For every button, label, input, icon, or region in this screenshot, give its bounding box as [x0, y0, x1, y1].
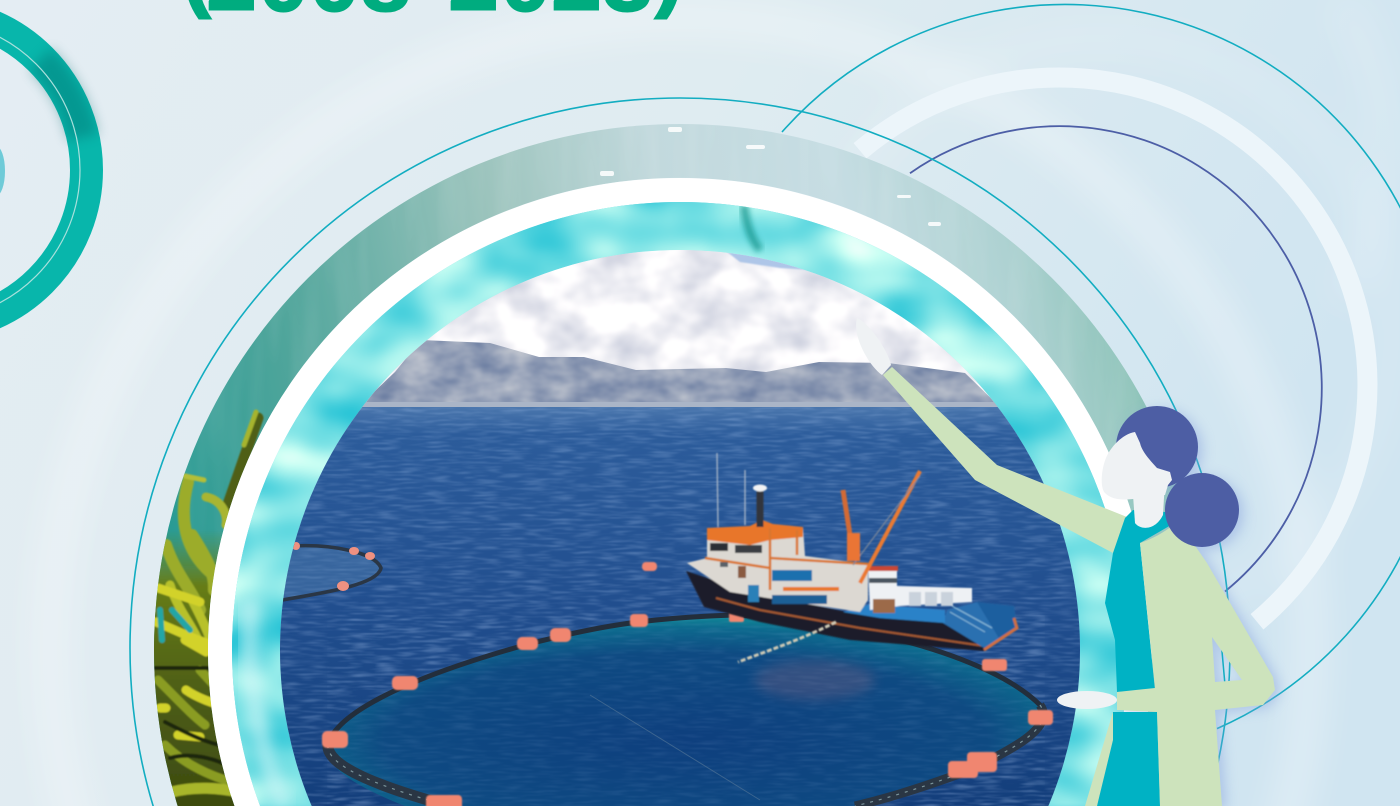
seaweed [140, 412, 258, 806]
main net pen water [327, 615, 1045, 806]
mountains [362, 340, 998, 406]
neck [1133, 480, 1165, 528]
raised arm [883, 367, 1127, 553]
hull [686, 571, 1017, 651]
clouds [360, 250, 1000, 410]
left jacket panel [1085, 712, 1113, 806]
net pen buoys [322, 562, 1053, 806]
masts and crane [860, 471, 920, 583]
main net pen ring [328, 615, 1045, 806]
iridescent ring [225, 195, 1135, 806]
sea [280, 407, 1080, 806]
stern deck [942, 602, 1000, 649]
pale thick arc, upper right [860, 78, 1367, 622]
jacket and right arm [1117, 521, 1275, 806]
aquaculture photo circle [280, 245, 1080, 806]
thin teal arc, upper right [782, 4, 1400, 729]
sky patch [728, 253, 805, 270]
seaweed ring [140, 110, 1220, 806]
cargo crate [873, 599, 895, 613]
raised hand [856, 318, 891, 375]
thin teal circle around the central ring [130, 98, 1230, 806]
decorative teal ring, top-left [0, 14, 86, 326]
blue deck [843, 604, 945, 623]
lower hand [1057, 691, 1117, 709]
hair top [1116, 406, 1198, 488]
dress [1097, 510, 1178, 806]
fishing boat [686, 453, 1017, 651]
hair bun [1165, 473, 1239, 547]
white deckhouse [868, 567, 972, 610]
white ring [220, 190, 1140, 806]
towing line [738, 622, 836, 662]
dark blue thin arc, upper right [910, 126, 1322, 592]
figure shadow [1121, 409, 1280, 806]
cabin [687, 527, 868, 612]
thin line seen behind figure [1221, 640, 1225, 685]
woman pointing figure [856, 318, 1280, 806]
face [1102, 432, 1172, 499]
small net pen [280, 542, 381, 600]
